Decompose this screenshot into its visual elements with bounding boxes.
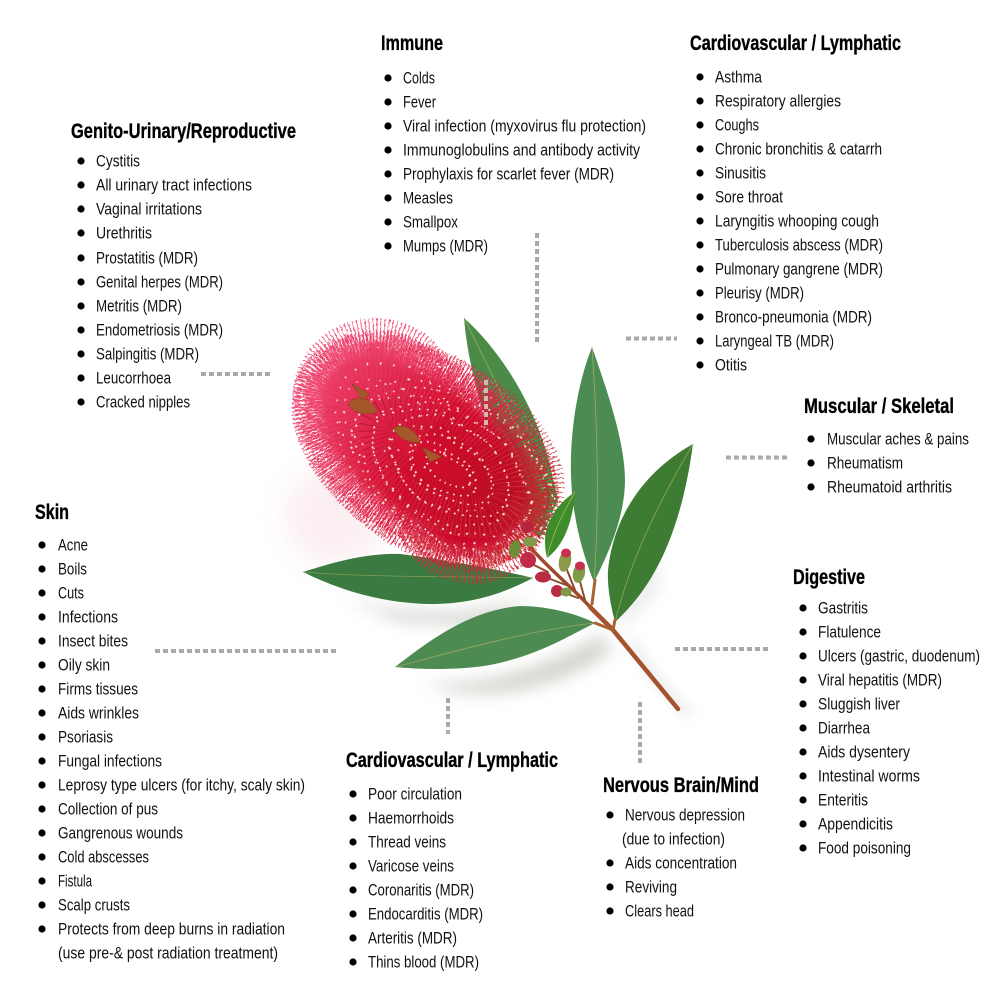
soft shadows: [285, 465, 690, 715]
panel: immune: [381, 32, 646, 256]
list: cardiovascular lymphatic bottom: Haemorrhoids: [368, 808, 454, 828]
list: nervous brain mind: Clears head: [625, 902, 694, 920]
list: digestive: Flatulence: [818, 622, 881, 642]
list: cardiovascular lymphatic top: Sore throat: [715, 188, 783, 206]
list: genito-urinary reproductive: Metritis (MDR): [96, 296, 182, 316]
list: skin: (use pre-& post radiation treatment): [58, 944, 278, 962]
list: digestive: Appendicitis: [818, 814, 893, 834]
heading: immune: Immune: [381, 32, 443, 55]
heading: genito-urinary reproductive: Genito-Urinary/Reproductive: [71, 120, 296, 143]
list: skin: [38, 536, 305, 962]
list: muscular skeletal: Rheumatoid arthritis: [827, 478, 952, 496]
list: skin: Psoriasis: [58, 728, 113, 746]
list: cardiovascular lymphatic top: Laryngeal TB (MDR): [715, 332, 834, 350]
dotted connector over flower: [484, 380, 488, 426]
flower buds: [508, 521, 587, 597]
list: cardiovascular lymphatic top: Pulmonary gangrene (MDR): [715, 260, 883, 278]
panel: nervous brain mind: [603, 774, 759, 920]
panel: genito-urinary reproductive: [71, 120, 296, 412]
list: cardiovascular lymphatic top: Chronic bronchitis & catarrh: [715, 140, 882, 158]
dotted connector: genito-urinary: [201, 372, 270, 376]
list: skin: Gangrenous wounds: [58, 824, 183, 842]
list: immune: Smallpox: [403, 212, 458, 232]
list: digestive: Aids dysentery: [818, 742, 910, 762]
list: digestive: [799, 598, 980, 858]
flower lobes fill: [326, 346, 518, 554]
list: cardiovascular lymphatic bottom: Endocarditis (MDR): [368, 904, 483, 924]
list: cardiovascular lymphatic top: Pleurisy (MDR): [715, 284, 804, 302]
list: cardiovascular lymphatic top: Bronco-pneumonia (MDR): [715, 308, 872, 326]
dotted connector: digestive: [675, 647, 769, 651]
leaf: small bright: [545, 492, 575, 558]
list: cardiovascular lymphatic top: Otitis: [715, 356, 747, 374]
dotted connector: skin: [155, 649, 338, 653]
dotted connector: cardiovascular top: [626, 336, 677, 340]
list: nervous brain mind: Nervous depression: [625, 806, 745, 824]
list: nervous brain mind: [606, 806, 745, 920]
list: digestive: Diarrhea: [818, 718, 870, 738]
list: digestive: Food poisoning: [818, 838, 911, 858]
leaf: left lower: [303, 554, 533, 604]
list: cardiovascular lymphatic top: Sinusitis: [715, 164, 766, 182]
list: immune: Prophylaxis for scarlet fever (MDR): [403, 164, 614, 184]
leaf: lower: [395, 606, 595, 669]
heading: cardiovascular lymphatic bottom: Cardiovascular / Lymphatic: [346, 749, 558, 772]
list: genito-urinary reproductive: Urethritis: [96, 224, 152, 242]
list: skin: Cuts: [58, 584, 84, 602]
list: cardiovascular lymphatic top: Laryngitis whooping cough: [715, 212, 879, 230]
stem: [528, 547, 678, 709]
list: genito-urinary reproductive: Leucorrhoea: [96, 368, 171, 388]
list: cardiovascular lymphatic bottom: Thins blood (MDR): [368, 952, 479, 972]
list: skin: Fistula: [58, 872, 92, 890]
list: cardiovascular lymphatic bottom: [349, 784, 483, 972]
list: skin: Protects from deep burns in radiation: [58, 920, 285, 938]
inner filament texture: [319, 355, 531, 545]
dense flower core: [289, 327, 561, 573]
list: cardiovascular lymphatic bottom: Varicose veins: [368, 856, 454, 876]
panel: muscular skeletal: [804, 395, 969, 496]
list: digestive: Intestinal worms: [818, 766, 920, 786]
list: cardiovascular lymphatic bottom: Poor circulation: [368, 784, 462, 804]
panel: cardiovascular lymphatic top: [690, 32, 901, 374]
list: skin: Insect bites: [58, 632, 128, 650]
list: digestive: Sluggish liver: [818, 694, 900, 714]
list: cardiovascular lymphatic bottom: Thread veins: [368, 832, 446, 852]
leaf: behind flower: [464, 318, 558, 540]
list: cardiovascular lymphatic top: Coughs: [715, 116, 759, 134]
brown bracts: [348, 384, 442, 462]
dotted connector: nervous: [638, 702, 642, 763]
list: genito-urinary reproductive: [77, 152, 252, 412]
flower head: [250, 288, 600, 612]
panel: skin: [35, 501, 305, 962]
list: genito-urinary reproductive: All urinary tract infections: [96, 176, 252, 194]
list: skin: Leprosy type ulcers (for itchy, scaly skin): [58, 776, 305, 794]
list: skin: Scalp crusts: [58, 896, 130, 914]
list: genito-urinary reproductive: Cystitis: [96, 152, 140, 170]
list: immune: [384, 68, 646, 256]
list: skin: Boils: [58, 560, 87, 578]
stamen spikes: [274, 310, 578, 592]
leaf: vertical: [571, 347, 625, 582]
list: genito-urinary reproductive: Vaginal irritations: [96, 200, 202, 218]
list: genito-urinary reproductive: Cracked nipples: [96, 392, 190, 412]
list: skin: Oily skin: [58, 656, 110, 674]
list: genito-urinary reproductive: Endometriosis (MDR): [96, 320, 223, 340]
list: cardiovascular lymphatic top: Tuberculosis abscess (MDR): [715, 236, 883, 254]
dotted connector: immune: [535, 233, 539, 342]
list: skin: Infections: [58, 608, 118, 626]
list: nervous brain mind: (due to infection): [622, 830, 725, 848]
heading: digestive: Digestive: [793, 566, 865, 589]
list: immune: Colds: [403, 68, 435, 88]
list: skin: Cold abscesses: [58, 848, 149, 866]
heading: cardiovascular lymphatic top: Cardiovascular / Lymphatic: [690, 32, 901, 55]
list: digestive: Gastritis: [818, 598, 868, 618]
list: digestive: Viral hepatitis (MDR): [818, 670, 942, 690]
list: immune: Viral infection (myxovirus flu protection): [403, 116, 646, 136]
list: cardiovascular lymphatic top: [696, 68, 883, 374]
list: genito-urinary reproductive: Salpingitis (MDR): [96, 344, 199, 364]
heading: nervous brain mind: Nervous Brain/Mind: [603, 774, 759, 797]
list: muscular skeletal: [807, 430, 969, 496]
panel: cardiovascular lymphatic bottom: [346, 749, 558, 972]
list: nervous brain mind: Aids concentration: [625, 854, 737, 872]
list: skin: Fungal infections: [58, 752, 162, 770]
heading: muscular skeletal: Muscular / Skeletal: [804, 395, 954, 418]
pale anther dots: [291, 330, 587, 601]
list: immune: Fever: [403, 92, 436, 112]
list: skin: Aids wrinkles: [58, 704, 139, 722]
list: cardiovascular lymphatic bottom: Coronaritis (MDR): [368, 880, 474, 900]
list: immune: Immunoglobulins and antibody activity: [403, 140, 640, 160]
list: immune: Mumps (MDR): [403, 236, 488, 256]
outer pale tips: [250, 288, 600, 612]
list: skin: Collection of pus: [58, 800, 158, 818]
list: digestive: Enteritis: [818, 790, 868, 810]
list: genito-urinary reproductive: Genital herpes (MDR): [96, 272, 223, 292]
list: skin: Firms tissues: [58, 680, 138, 698]
list: cardiovascular lymphatic top: Asthma: [715, 68, 762, 86]
list: genito-urinary reproductive: Prostatitis (MDR): [96, 248, 198, 268]
dotted connector: cardiovascular bottom: [446, 698, 450, 734]
list: immune: Measles: [403, 188, 453, 208]
list: skin: Acne: [58, 536, 88, 554]
leaf: right: [608, 444, 693, 622]
list: cardiovascular lymphatic top: Respiratory allergies: [715, 92, 841, 110]
heading: skin: Skin: [35, 501, 69, 524]
illustration: bottlebrush flower branch: [250, 288, 693, 715]
dotted connector: muscular: [726, 456, 787, 460]
list: nervous brain mind: Reviving: [625, 878, 677, 896]
panel: digestive: [793, 566, 980, 858]
list: muscular skeletal: Rheumatism: [827, 454, 903, 472]
list: cardiovascular lymphatic bottom: Arteritis (MDR): [368, 928, 457, 948]
